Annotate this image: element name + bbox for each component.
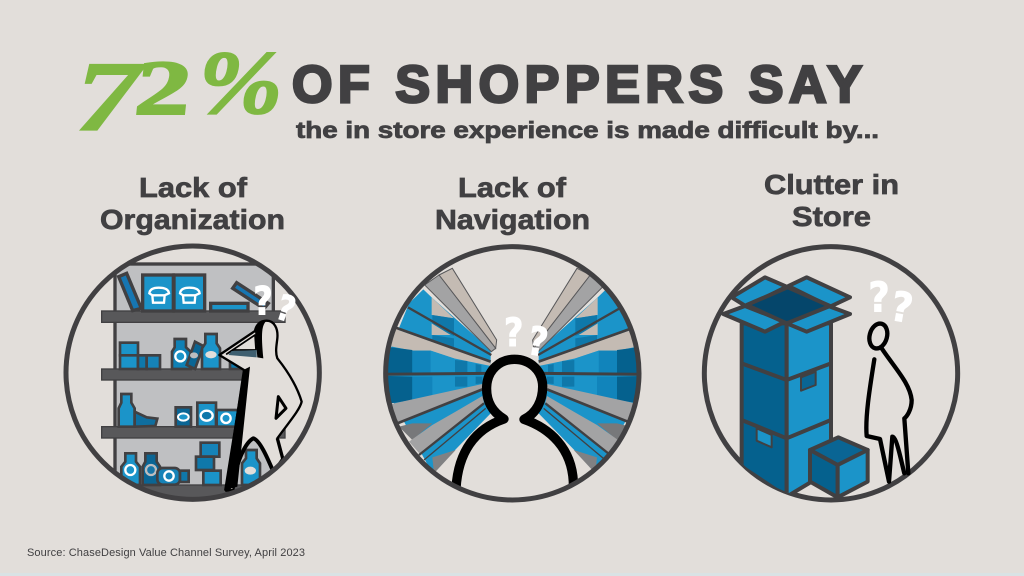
small box	[810, 437, 868, 497]
shelf unit	[102, 264, 285, 498]
heading: clutter in store: Clutter in	[764, 169, 899, 200]
panel: lack of organization illustration	[66, 246, 319, 499]
panel: clutter in store illustration	[704, 247, 958, 500]
circle outline	[66, 246, 319, 499]
heading: lack of navigation: Lack of	[458, 172, 567, 203]
title: of shoppers say: OF SHOPPERS SAY	[292, 56, 862, 114]
question marks: ?	[253, 278, 273, 324]
question marks: ?	[887, 283, 916, 333]
standing figure	[866, 322, 912, 482]
title: 72%: 7	[75, 42, 144, 152]
question marks	[504, 309, 551, 366]
circle outline	[704, 247, 958, 500]
title: 72%: 2	[131, 44, 196, 131]
left aisle shelves	[381, 268, 497, 473]
second shelf products	[120, 334, 247, 369]
person silhouette	[456, 359, 573, 507]
question marks	[253, 278, 300, 331]
figure scratching head	[219, 321, 302, 491]
right aisle shelves	[532, 268, 636, 469]
source note: Source: ChaseDesign Value Channel Survey, April 2023	[27, 547, 305, 559]
question marks: ?	[271, 287, 300, 331]
stack of boxes	[742, 323, 831, 497]
heading: clutter in store	[764, 169, 899, 232]
heading: lack of navigation	[435, 172, 590, 235]
title: 72%: %	[199, 33, 282, 133]
bottom shelf products	[121, 443, 260, 485]
heading: lack of organization	[100, 172, 285, 235]
title: 72%	[75, 33, 282, 152]
question marks	[868, 275, 916, 333]
circle outline	[386, 247, 639, 500]
heading: lack of organization: Organization	[100, 204, 285, 235]
heading: lack of organization: Lack of	[139, 172, 248, 203]
question marks: ?	[504, 309, 523, 356]
subtitle: the in store experience is made difficult by...	[296, 117, 879, 143]
heading: clutter in store: Store	[792, 201, 871, 232]
panel: lack of navigation illustration	[381, 247, 649, 507]
question marks: ?	[524, 317, 551, 366]
third shelf products	[119, 394, 240, 427]
top shelf products	[119, 273, 268, 311]
heading: lack of navigation: Navigation	[435, 204, 590, 235]
open box flaps	[723, 277, 850, 332]
question marks: ?	[868, 275, 890, 322]
